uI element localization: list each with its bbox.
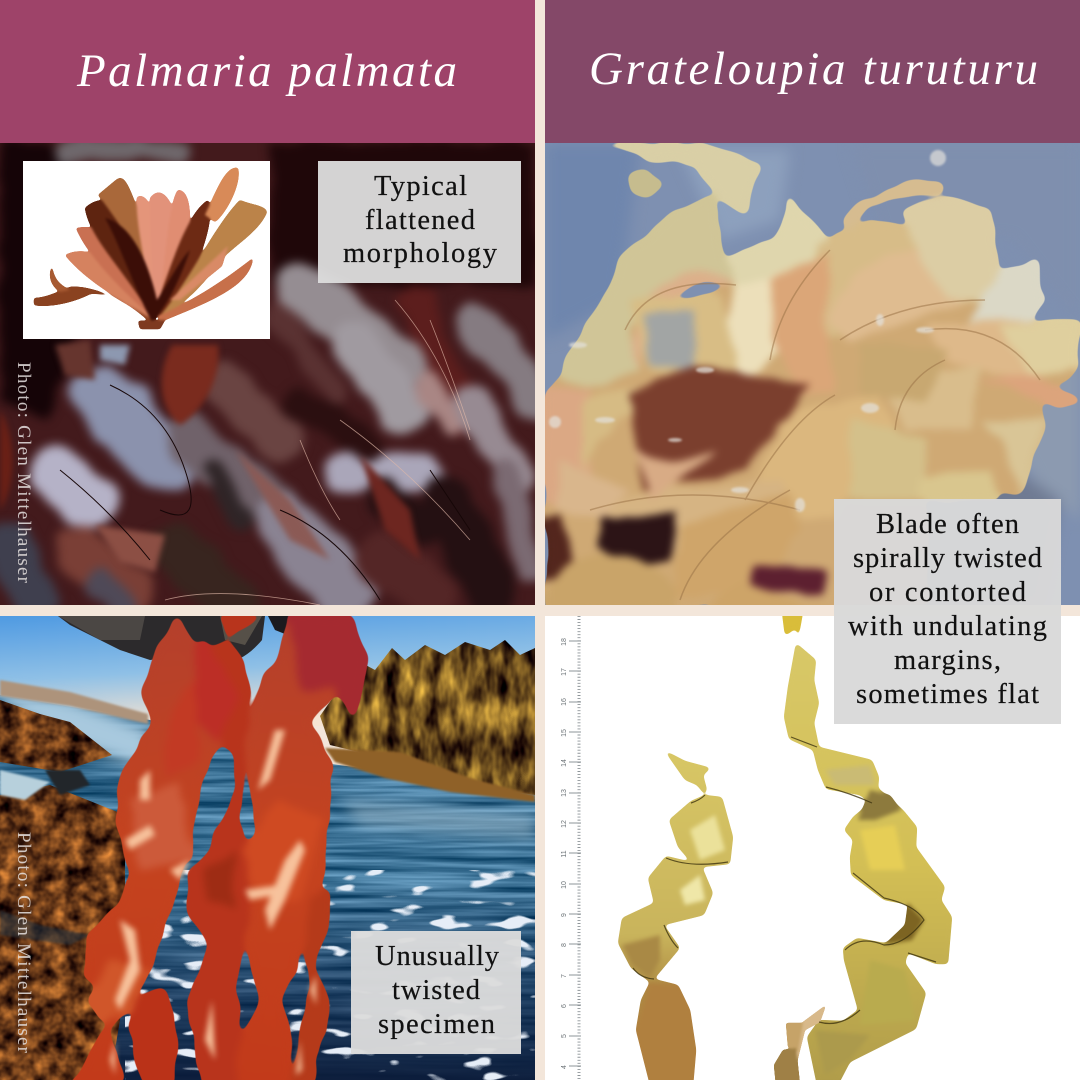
- header: Palmaria palmata: Palmaria palmata: [76, 45, 457, 97]
- trees and shore: [320, 640, 535, 795]
- callout: typical flattened morphology: flattened: [365, 205, 475, 236]
- callout: blade often spirally twisted: sometimes flat: [856, 679, 1039, 710]
- ruler: 13: [561, 789, 568, 797]
- right blade: [782, 612, 952, 1080]
- ruler: 4: [561, 1065, 568, 1069]
- ruler: 17: [561, 668, 568, 676]
- header: Palmaria palmata: [0, 0, 535, 143]
- ruler: 15: [561, 729, 568, 737]
- ruler: 11: [561, 850, 568, 858]
- callout: blade often spirally twisted: with undulating: [848, 611, 1047, 642]
- ruler: 10: [561, 881, 568, 889]
- header: Grateloupia turuturu: Grateloupia turuturu: [589, 43, 1038, 95]
- inset: pressed Palmaria specimen: [23, 161, 270, 339]
- callout: unusually twisted specimen: [351, 931, 521, 1054]
- small blade fragments: [774, 1005, 826, 1080]
- blade fold lines: [590, 250, 1040, 600]
- ruler: 8: [561, 943, 568, 947]
- panel: Grateloupia pressed specimens on white: [545, 612, 1080, 1080]
- photo credit top: Photo: Glen Mittelhauser: [13, 362, 34, 584]
- callout: blade often spirally twisted: [834, 499, 1061, 724]
- water: [0, 695, 535, 1080]
- dark blade margins: [633, 737, 936, 1024]
- header: Grateloupia turuturu: [545, 0, 1080, 143]
- callout: blade often spirally twisted: margins,: [894, 645, 1001, 676]
- base mass: [545, 282, 1078, 605]
- callout: unusually twisted specimen: Unusually: [375, 941, 500, 972]
- callout: typical flattened morphology: morphology: [343, 238, 498, 269]
- callout: blade often spirally twisted: Blade often: [876, 509, 1019, 540]
- callout: typical flattened morphology: Typical: [374, 171, 467, 202]
- left blade: [618, 750, 733, 1080]
- callout: blade often spirally twisted: spirally twisted: [853, 543, 1042, 574]
- ruler: 9: [561, 913, 568, 917]
- ruler: 5: [561, 1034, 568, 1038]
- foam: [125, 870, 535, 1080]
- glove: [58, 616, 289, 660]
- ruler: [561, 616, 581, 1080]
- ruler: 12: [561, 820, 568, 828]
- sky: [0, 616, 535, 726]
- callout: blade often spirally twisted: or contorted: [869, 577, 1026, 608]
- ruler: 7: [561, 974, 568, 978]
- ruler: 18: [561, 638, 568, 646]
- stem: [34, 287, 152, 322]
- seaweed: three red strands: [68, 616, 368, 1080]
- ruler: 16: [561, 698, 568, 706]
- blades: [65, 251, 150, 318]
- callout: unusually twisted specimen: twisted: [392, 975, 480, 1006]
- panel: Palmaria twisted specimen photo: [0, 616, 535, 1080]
- callout: typical flattened morphology: [318, 161, 521, 283]
- ruler: 6: [561, 1004, 568, 1008]
- photo credit bottom: Photo: Glen Mittelhauser: [13, 832, 34, 1054]
- ruler: 14: [561, 759, 568, 767]
- callout: unusually twisted specimen: specimen: [378, 1009, 495, 1040]
- panel: Grateloupia underwater photo: [545, 143, 1080, 610]
- rocks: [0, 700, 112, 772]
- panel: Palmaria underwater photo: [0, 143, 535, 605]
